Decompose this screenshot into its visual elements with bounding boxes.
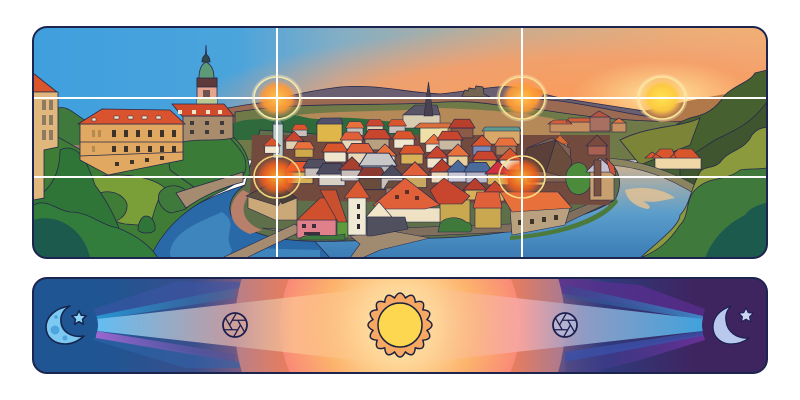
tree by river <box>566 163 592 195</box>
castle rear building <box>172 104 234 142</box>
icon: left moon and star <box>46 306 86 344</box>
yellow hall <box>316 118 343 142</box>
green river edge <box>510 198 618 240</box>
castle main building <box>78 109 185 175</box>
big red roofed house <box>373 178 440 222</box>
marker: lower left <box>254 156 300 198</box>
river <box>316 166 691 257</box>
right light rays <box>540 278 705 373</box>
red gable behind pink house <box>320 190 348 225</box>
panel: light timeline band <box>33 277 767 373</box>
icon: right moon and star <box>713 306 753 344</box>
quay wall <box>262 200 614 240</box>
distant hills <box>228 86 767 160</box>
river bank right <box>610 158 694 192</box>
hilltop church <box>403 82 453 143</box>
outer glow ring <box>235 277 565 373</box>
castle left wing <box>33 73 58 200</box>
moon backing right <box>702 300 752 350</box>
long orange roofed hall <box>500 192 572 235</box>
garden trees <box>438 218 472 232</box>
right wooded hills <box>620 70 766 184</box>
icon: sun <box>368 293 432 357</box>
rows of houses <box>263 119 608 201</box>
left river light patches <box>170 212 320 258</box>
stone bridge <box>222 224 430 258</box>
icon: right aperture <box>553 313 577 337</box>
cream gable <box>366 202 392 217</box>
golden intersection markers <box>253 76 686 198</box>
inner sun glow <box>280 277 520 373</box>
town buildings <box>246 82 616 240</box>
sky <box>34 28 766 122</box>
dark tree line behind town <box>232 115 420 140</box>
ochre gable house <box>430 178 470 224</box>
teal roofed hall <box>482 127 521 144</box>
dark slate house <box>367 217 408 236</box>
icon: left aperture <box>223 313 247 337</box>
white tower <box>344 180 370 235</box>
low green lawn <box>300 234 345 240</box>
marker: lower right <box>499 156 545 198</box>
distant town right <box>548 111 701 169</box>
marker: setting sun <box>638 76 686 120</box>
pink house <box>297 198 336 238</box>
grid lines: rule of thirds <box>34 28 766 257</box>
moon backing left <box>48 300 98 350</box>
marker: upper left <box>253 76 301 120</box>
riverside houses <box>586 158 616 200</box>
left light rays <box>93 282 240 368</box>
central beam right <box>400 285 703 365</box>
right foreground trees <box>640 127 767 258</box>
left river pool <box>150 185 330 258</box>
castle tower <box>197 45 217 106</box>
yellow town house <box>473 192 502 228</box>
green house <box>337 222 348 238</box>
panel: town photo with rule-of-thirds grid <box>33 27 767 258</box>
town peninsula ground <box>230 130 620 241</box>
left bank salmon shore <box>231 190 262 234</box>
brown riverside house <box>246 182 297 220</box>
river reflection <box>625 188 675 209</box>
church tower <box>273 116 283 158</box>
central beam left <box>97 285 400 365</box>
marker: upper right <box>498 76 546 120</box>
left wooded slope <box>33 107 250 258</box>
large brown gabled house <box>520 138 572 182</box>
